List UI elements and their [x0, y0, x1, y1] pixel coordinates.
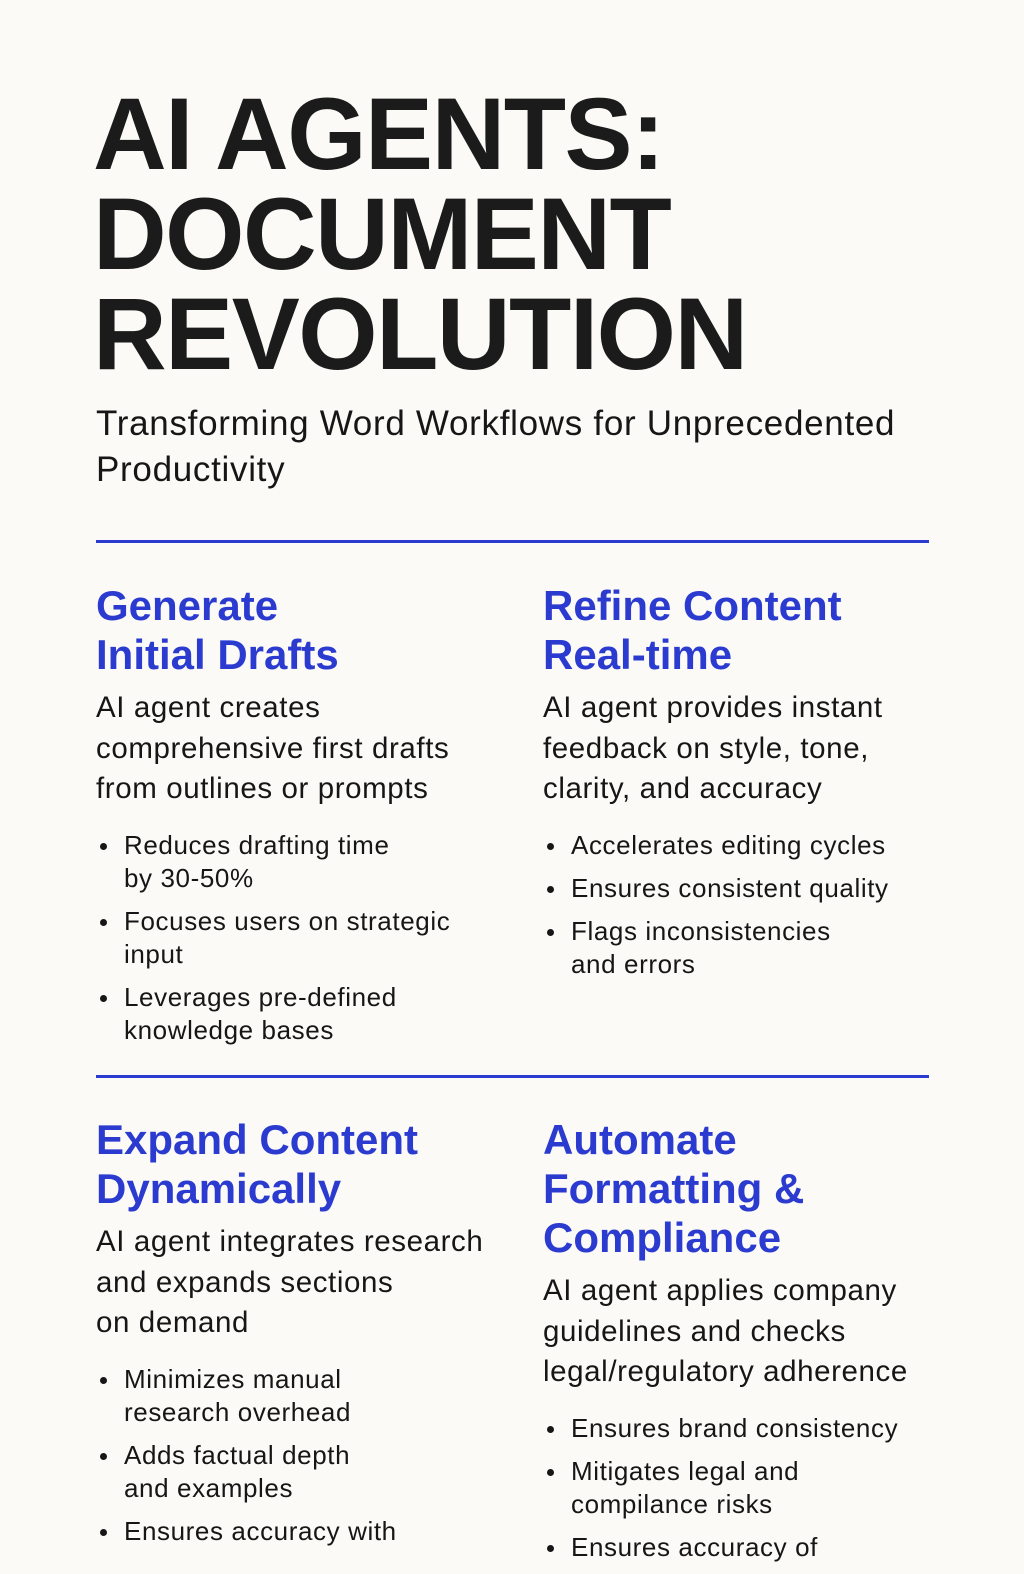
heading: generate: Generate [96, 582, 278, 629]
text: generate description: from outlines or prompts [96, 772, 428, 805]
text: generate description: AI agent creates [96, 691, 320, 724]
subtitle: Transforming Word Workflows for Unprecedented Productivity [96, 404, 895, 489]
heading: expand: Expand Content [96, 1116, 418, 1163]
heading: refine: Real-time [543, 631, 732, 678]
text: automate description: guidelines and checks [543, 1314, 846, 1348]
heading: expand [96, 1116, 418, 1212]
text: refine description: feedback on style, tone, [543, 732, 869, 764]
text: automate description: legal/regulatory adherence [543, 1355, 908, 1388]
title [93, 77, 747, 391]
bullets: refine [547, 830, 889, 978]
bullets: automate: Ensures brand consistency [571, 1412, 898, 1442]
text: expand description [96, 1225, 483, 1339]
bullets: refine: Ensures consistent quality [571, 872, 889, 902]
text: expand description: AI agent integrates research [96, 1225, 483, 1258]
bullets: expand: Ensures accuracy with [124, 1516, 397, 1546]
title: AI AGENTS: [93, 77, 664, 191]
bullets: generate: Leverages pre-defined [124, 982, 397, 1012]
bullets: expand: and examples [124, 1472, 293, 1502]
bullets: generate: by 30-50% [124, 862, 254, 892]
heading: automate: Formatting & [543, 1165, 804, 1212]
bullets: expand: Adds factual depth [124, 1440, 350, 1470]
heading: automate: Automate [543, 1116, 737, 1163]
bullets: automate [547, 1412, 898, 1562]
bullets: refine: Flags inconsistencies [571, 916, 831, 946]
bullets: automate: compilance risks [571, 1488, 773, 1518]
bullets: generate: input [124, 938, 183, 968]
panel: generate initial drafts [96, 582, 450, 1044]
heading: generate: Initial Drafts [96, 631, 339, 678]
text: refine description: clarity, and accuracy [543, 772, 822, 805]
bullets: refine: and errors [571, 948, 696, 978]
bullets: refine: Accelerates editing cycles [571, 830, 886, 860]
text: automate description: AI agent applies company [543, 1274, 897, 1307]
text: expand description: and expands sections [96, 1266, 393, 1298]
heading: generate [96, 582, 339, 678]
bullets: expand: Minimizes manual [124, 1364, 342, 1394]
text: generate description: comprehensive first drafts [96, 732, 449, 764]
title: REVOLUTION [93, 277, 747, 391]
heading: refine [543, 582, 842, 678]
text: refine description: AI agent provides instant [543, 691, 883, 724]
bullets: generate: knowledge bases [124, 1014, 334, 1044]
heading: automate: Compliance [543, 1214, 781, 1261]
bullets: automate: Mitigates legal and [571, 1456, 799, 1486]
heading: automate [543, 1116, 804, 1261]
bullets: expand: research overhead [124, 1396, 351, 1426]
bullets: expand [100, 1364, 397, 1546]
text: refine description [543, 691, 883, 805]
title: DOCUMENT [93, 177, 670, 291]
bullets: generate: Reduces drafting time [124, 830, 390, 860]
panel: automate formatting [543, 1116, 908, 1562]
text: automate description [543, 1274, 908, 1388]
heading: refine: Refine Content [543, 582, 842, 629]
text: generate description [96, 691, 449, 805]
bullets: generate [100, 830, 450, 1044]
heading: expand: Dynamically [96, 1165, 341, 1212]
panel: expand content [96, 1116, 483, 1546]
panel: refine content [543, 582, 889, 978]
bullets: generate: Focuses users on strategic [124, 906, 450, 936]
text: expand description: on demand [96, 1306, 249, 1339]
bullets: automate: Ensures accuracy of [571, 1532, 818, 1562]
